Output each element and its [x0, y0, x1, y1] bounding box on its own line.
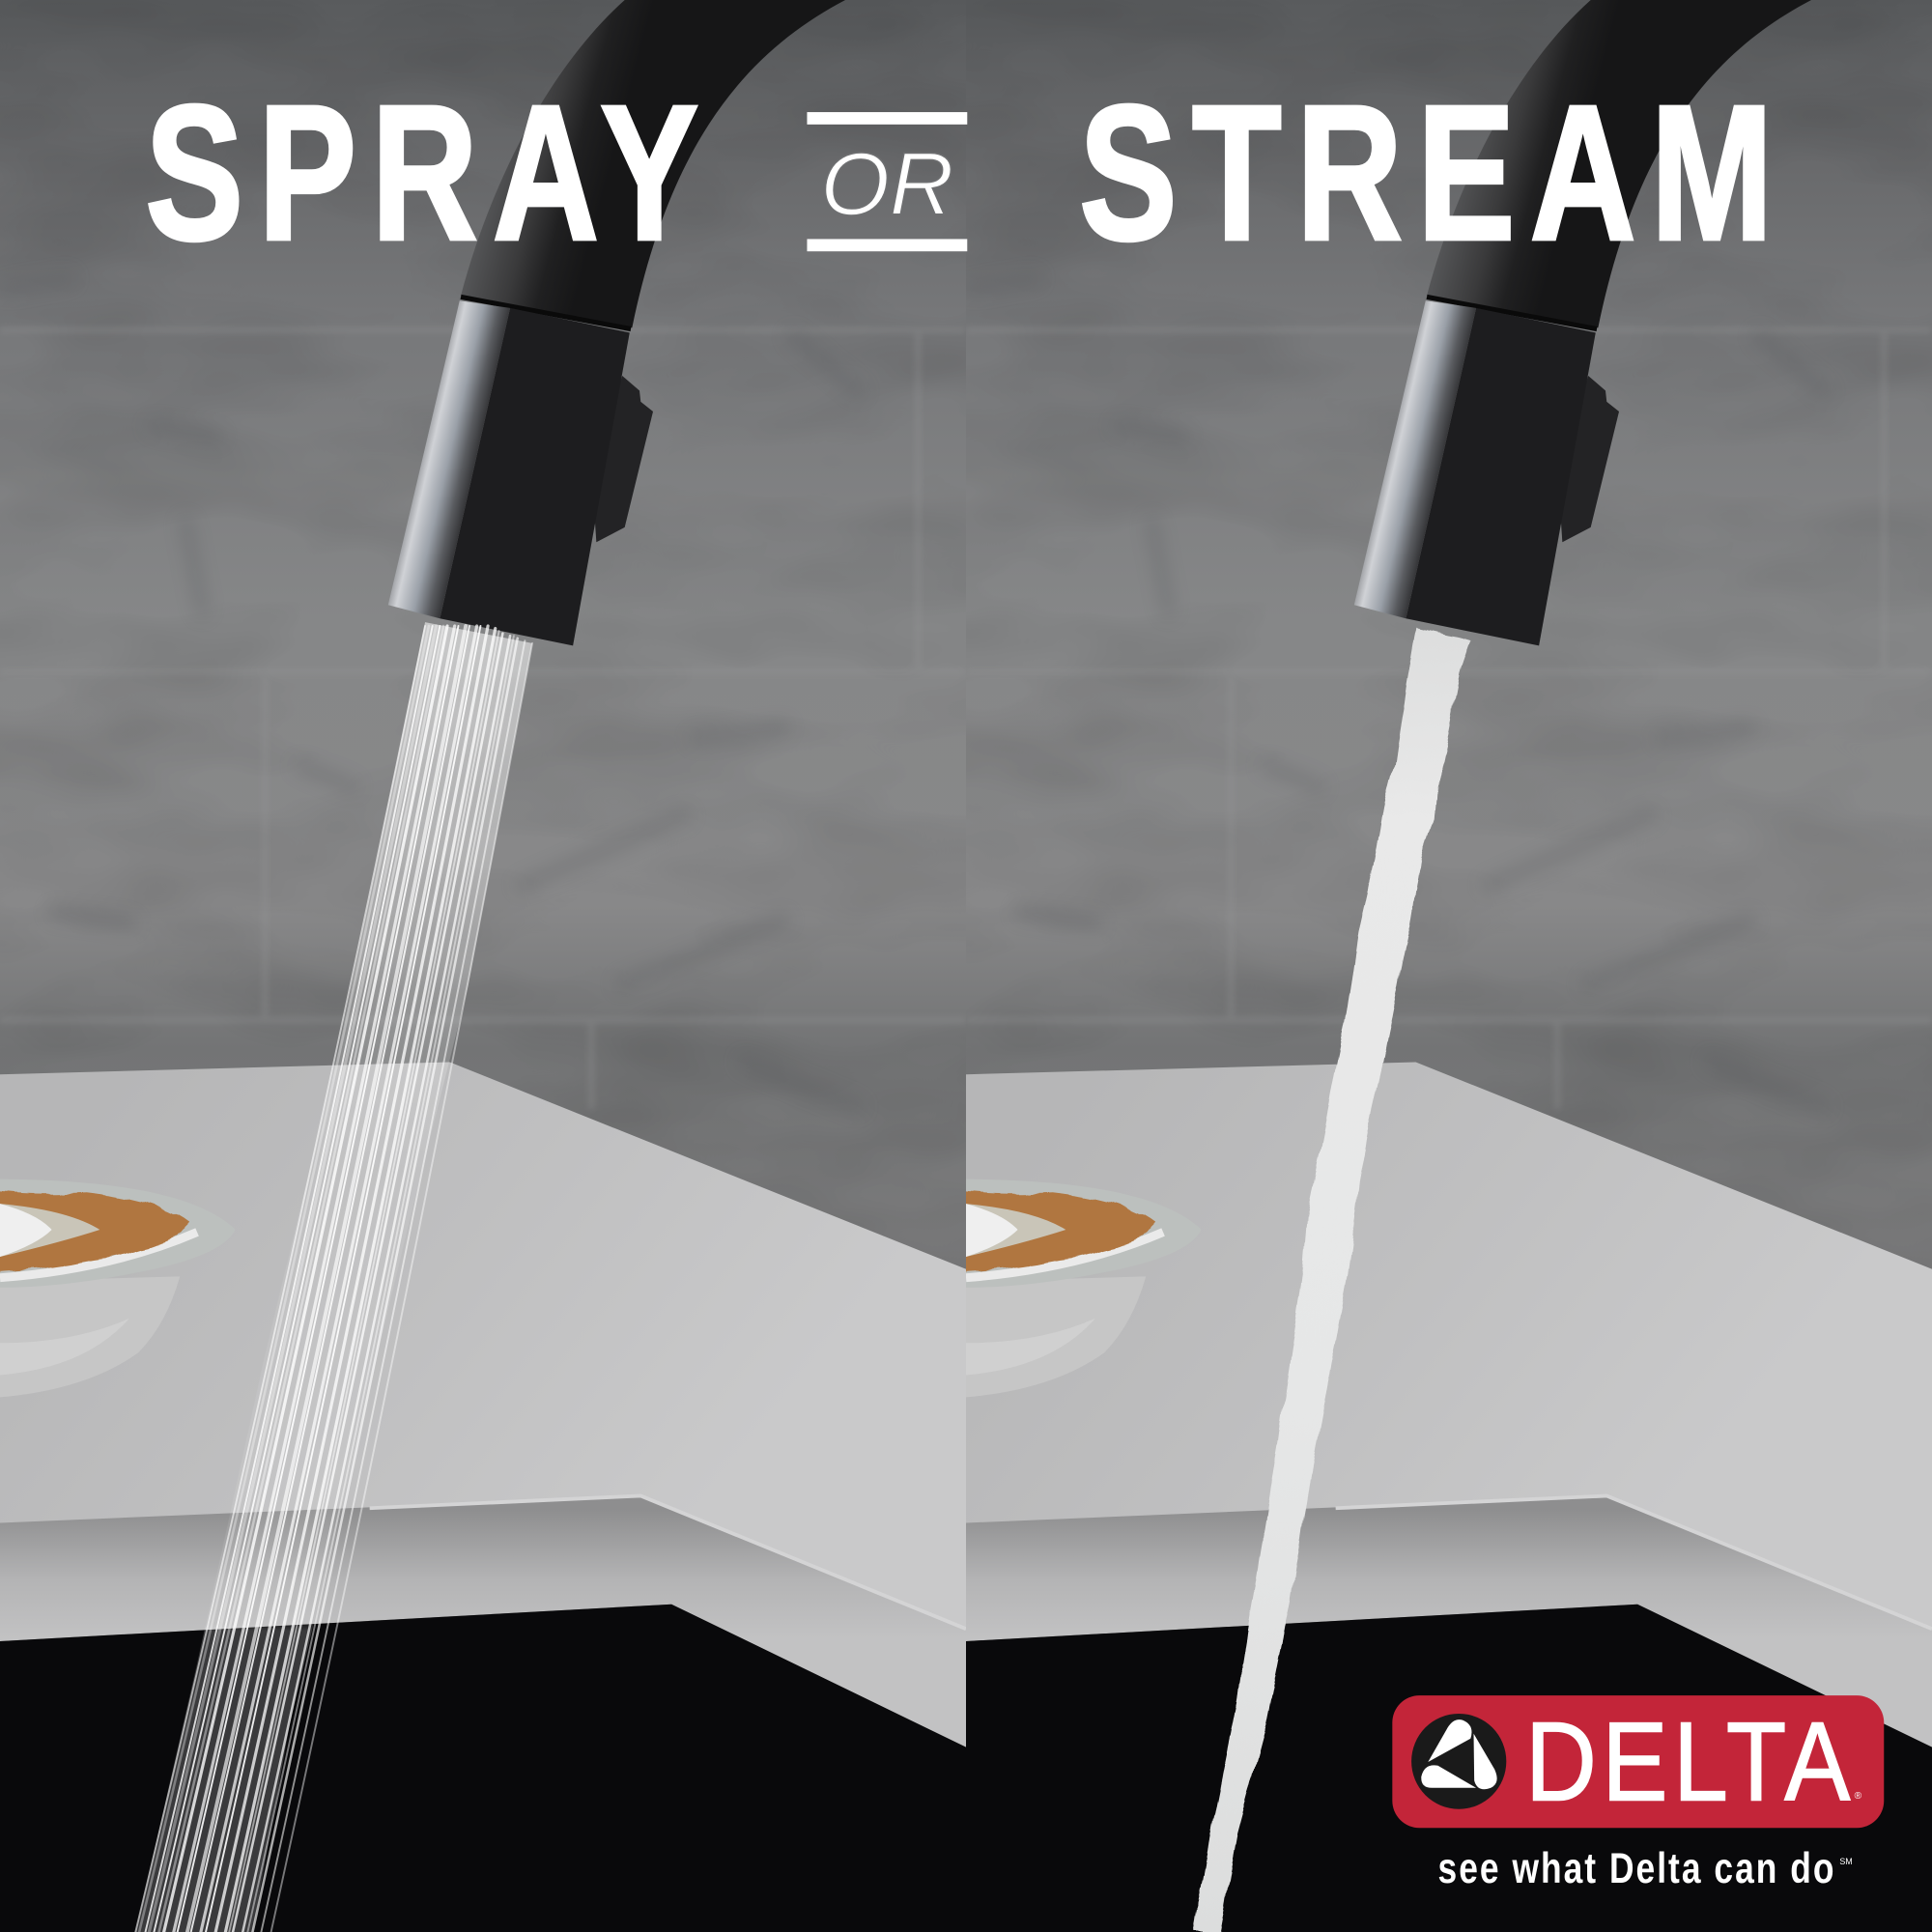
registered mark: ®: [1855, 1791, 1862, 1802]
marble tile wall: [0, 0, 966, 1293]
sprayer head highlight facet: [388, 300, 510, 618]
panel: stream photo scene: [966, 0, 1932, 1932]
title: OR with rules: [807, 112, 967, 251]
sprayer head body: [440, 308, 630, 645]
tagline: see what Delta can do: [1438, 1845, 1836, 1892]
rim crimp highlight: [0, 1233, 197, 1278]
stream water: [1193, 627, 1471, 1932]
logo red badge: [1392, 1695, 1884, 1828]
kitchen countertop: [0, 1062, 966, 1747]
trigger button: [591, 376, 653, 542]
title: SPRAY: SPRAY: [146, 66, 714, 280]
service mark: SM: [1839, 1857, 1853, 1866]
pie crust: [0, 1191, 188, 1271]
dish rim: [0, 1179, 236, 1288]
logo wordmark: DELTA: [1525, 1699, 1856, 1825]
collar seam: [461, 297, 631, 329]
dish body: [0, 1276, 180, 1397]
black sink basin: [0, 1605, 966, 1932]
spray water: [135, 622, 532, 1932]
pie in glass dish: [0, 1179, 236, 1397]
title: OR with rules: OR: [820, 135, 953, 234]
Delta logo: [1392, 1695, 1884, 1892]
faucet neck: [461, 0, 845, 327]
faucet: [388, 0, 845, 645]
panel: spray photo scene: [0, 0, 966, 1932]
pie filling: [0, 1204, 99, 1257]
logo emblem: [1411, 1714, 1506, 1809]
